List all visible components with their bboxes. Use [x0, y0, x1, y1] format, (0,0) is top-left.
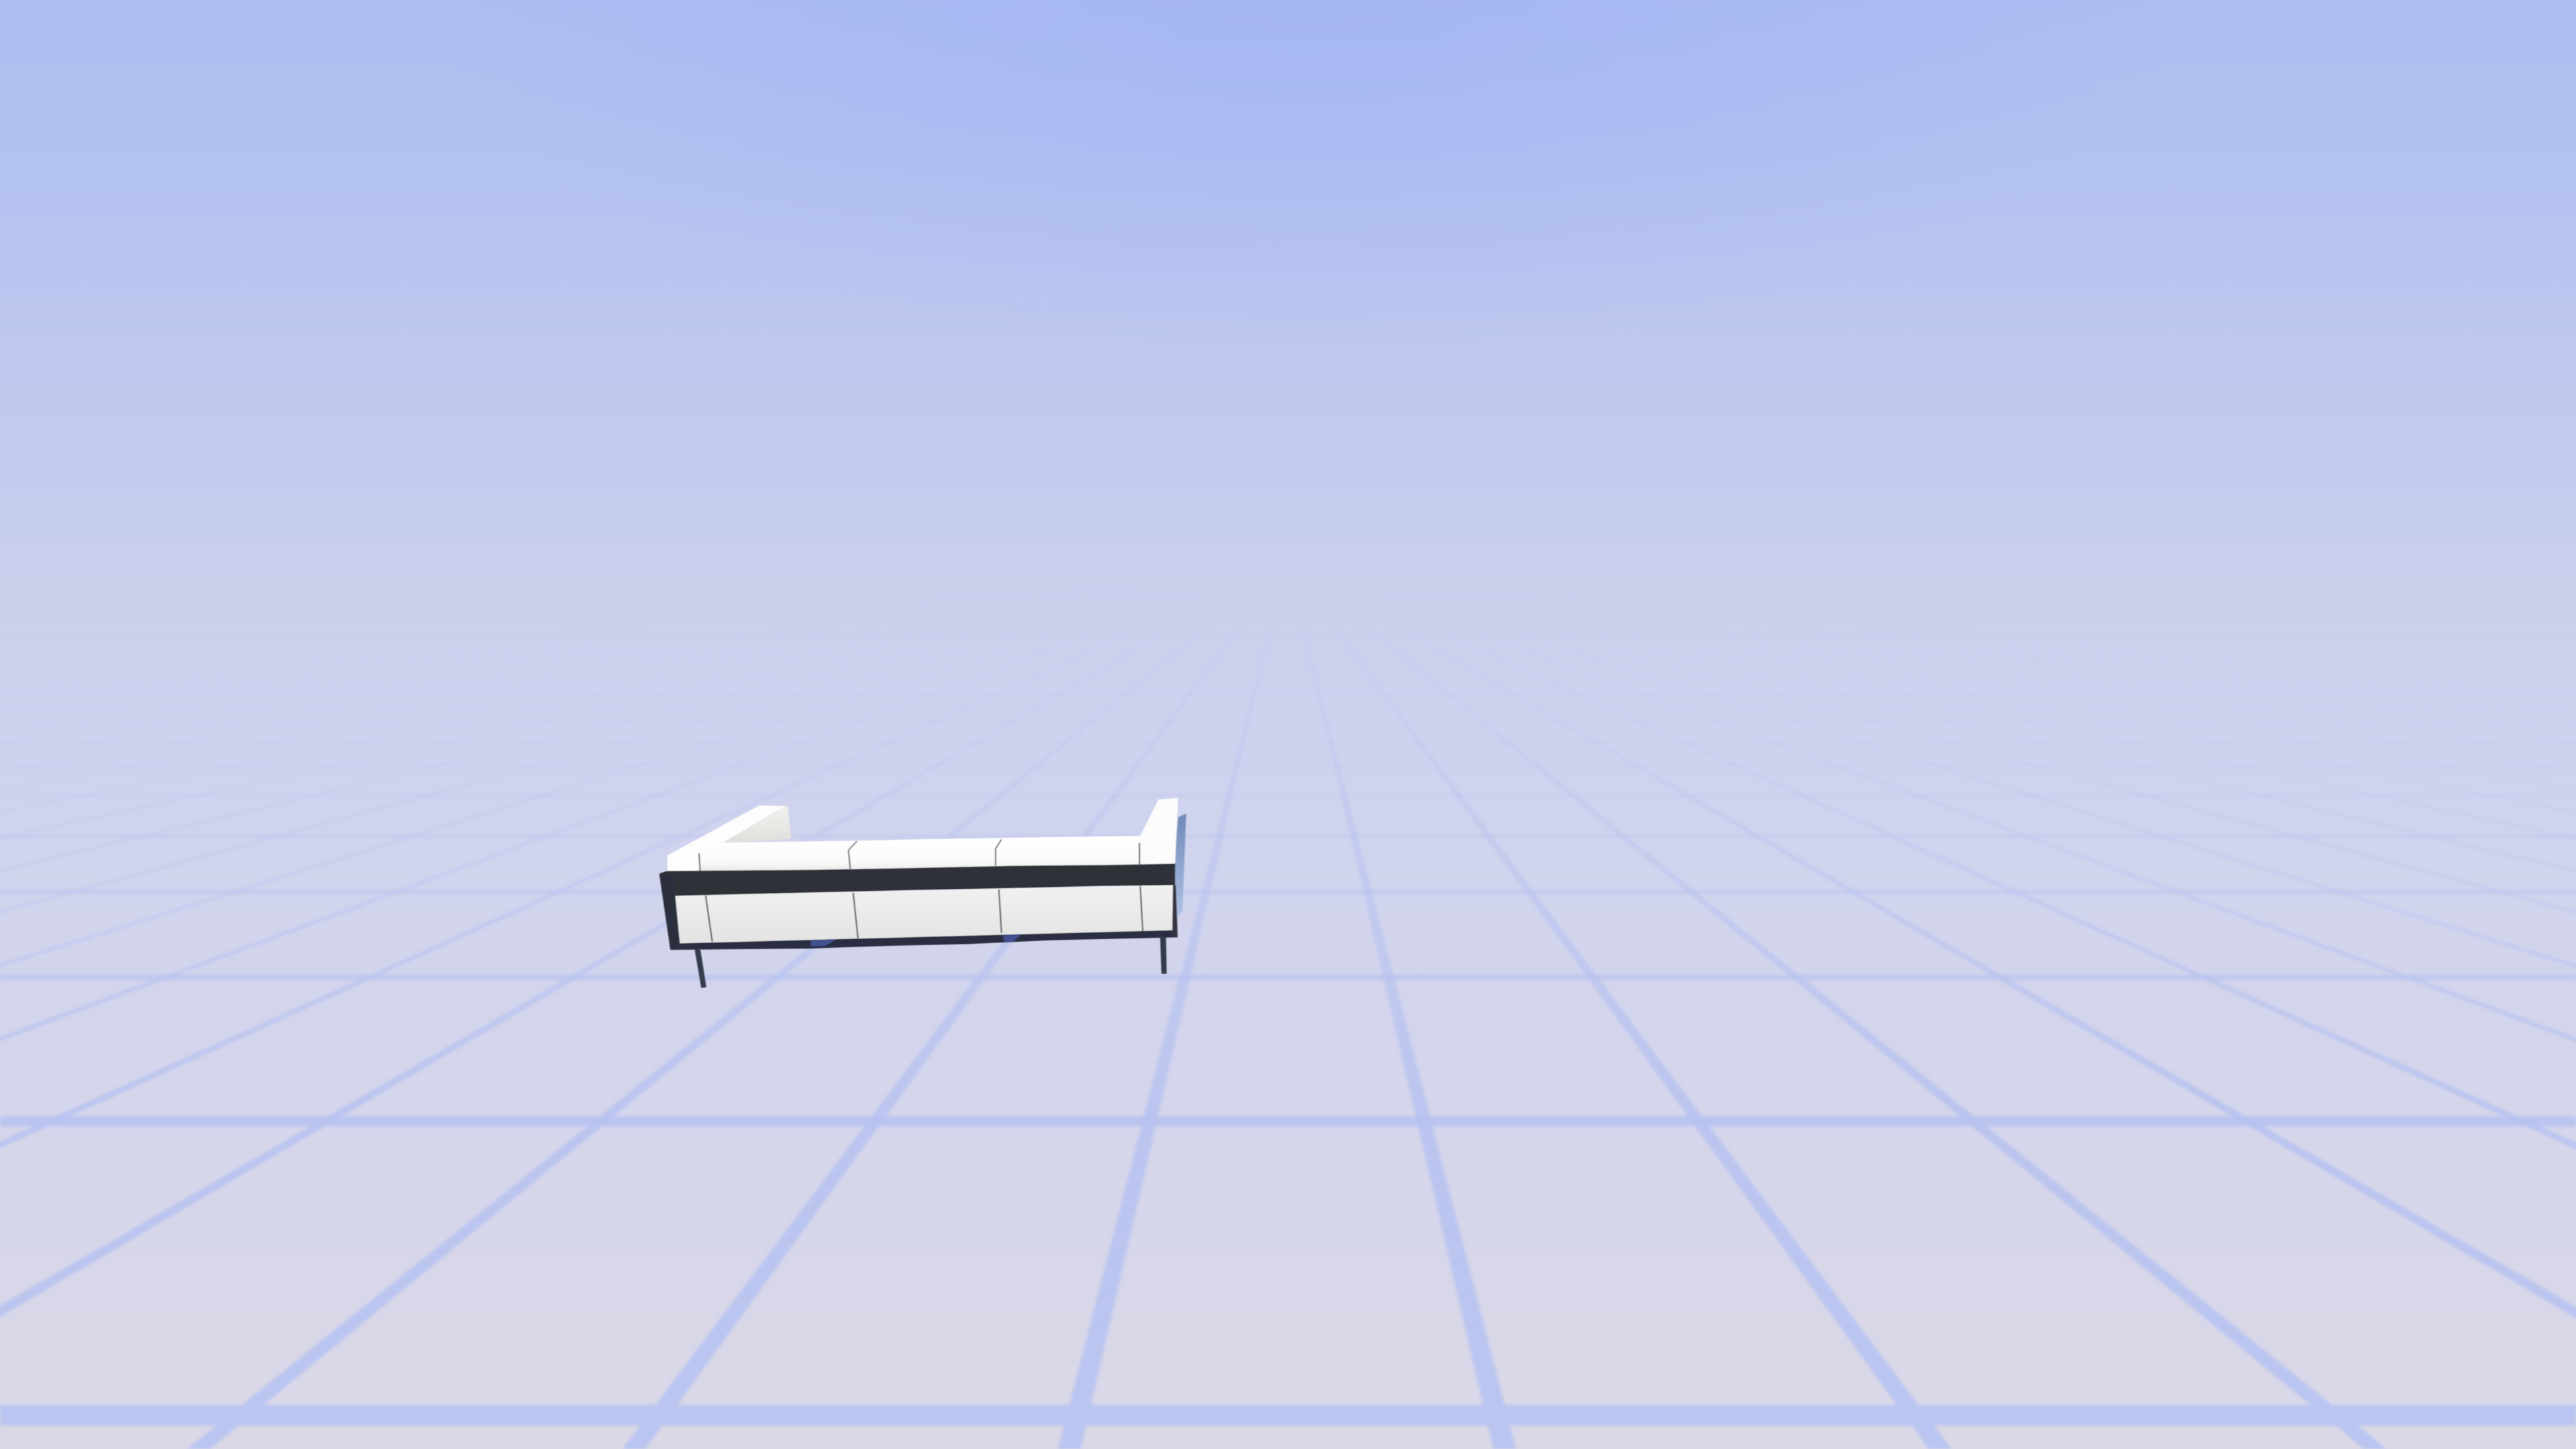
- sofa: inner face of far arm: [722, 806, 791, 843]
- sofa: near arm: [1140, 798, 1178, 865]
- sofa: lower seams: [706, 886, 1143, 942]
- sofa: dark left frame: [659, 874, 680, 950]
- sofa: floor line showing through frame: [811, 934, 1020, 947]
- sofa: top of far arm: [667, 806, 784, 871]
- grid lines receding to the horizon: [0, 562, 2576, 1449]
- sofa: back cushion seams: [699, 839, 1140, 871]
- sofa: bottom frame: [670, 930, 1177, 950]
- floor grid in perspective: [0, 562, 2576, 1449]
- sofa: blue shaded end panel: [1174, 814, 1186, 924]
- sofa: [659, 798, 1186, 988]
- sofa: back cushions: [699, 836, 1140, 872]
- sofa: left leg: [694, 949, 706, 988]
- sofa: right leg: [1160, 937, 1167, 974]
- sofa: dark horizontal band: [660, 863, 1175, 896]
- sofa: right frame edge: [1172, 885, 1178, 937]
- grid lines across the floor: [0, 637, 2576, 1426]
- sofa: lower front panel: [673, 885, 1175, 943]
